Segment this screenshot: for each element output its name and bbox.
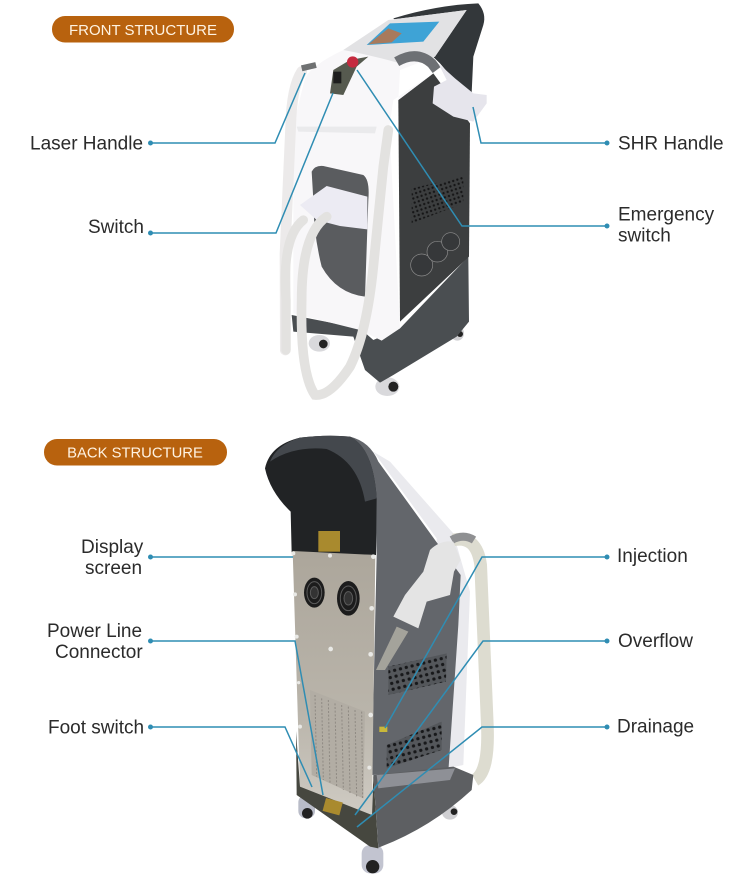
callout: Drainage: Drainage	[617, 716, 694, 738]
handle holder	[300, 186, 367, 229]
top hood	[265, 436, 377, 555]
callout: SHR Handle	[473, 107, 724, 154]
callout: Emergency switch	[357, 70, 715, 246]
callout: Injection: Injection	[617, 546, 688, 567]
callout: Foot switch: Foot switch	[48, 718, 144, 738]
heading: back structure: BACK STRUCTURE	[67, 446, 203, 462]
side base	[373, 767, 473, 848]
callout: Display screen	[81, 537, 293, 579]
front base	[292, 257, 469, 383]
top head dark	[393, 3, 484, 100]
callout: Power Line Connector: Power Line	[47, 621, 142, 642]
side vents and fans	[411, 177, 463, 276]
grey window	[312, 166, 369, 297]
warning label	[318, 531, 340, 552]
rear vent	[310, 690, 365, 798]
callout: Overflow	[355, 631, 693, 815]
display switch and emergency button	[330, 57, 368, 95]
white top slope	[373, 452, 470, 768]
callout: Laser Handle	[30, 73, 305, 154]
side connectors	[379, 727, 387, 732]
callout: Power Line Connector	[47, 621, 323, 795]
laser handle cable	[285, 72, 302, 350]
callout: Emergency switch: switch	[618, 226, 671, 246]
rear base	[296, 731, 378, 848]
callout: Switch	[88, 93, 333, 238]
callout: Emergency switch: Emergency	[618, 204, 715, 226]
heading: back structure	[44, 439, 227, 466]
front machine illustration	[285, 3, 487, 396]
back casters	[298, 795, 458, 873]
callout: Switch: Switch	[88, 217, 144, 238]
SHR handle	[433, 63, 487, 122]
callout: Overflow: Overflow	[618, 631, 693, 652]
shaded top face	[343, 10, 467, 63]
heading: front structure: FRONT STRUCTURE	[69, 22, 217, 39]
cable hose left	[285, 220, 303, 350]
callout: Drainage	[357, 716, 694, 827]
back machine illustration	[265, 436, 488, 873]
callout: Foot switch	[48, 718, 312, 787]
grey side panel	[350, 437, 461, 775]
main white body	[293, 10, 467, 341]
front panel recess	[297, 127, 377, 133]
cable hose front	[301, 130, 388, 395]
callout: SHR Handle: SHR Handle	[618, 134, 724, 154]
bolts	[291, 551, 376, 770]
callout: Injection	[385, 546, 688, 728]
front rear casters	[309, 326, 464, 396]
CE label	[323, 798, 343, 815]
dark side panel	[398, 73, 470, 322]
handgun handle	[393, 541, 461, 628]
heading: front structure	[52, 16, 234, 42]
callout: Display screen: screen	[85, 558, 142, 579]
side vents	[387, 653, 447, 768]
callout: Display screen: Display	[81, 537, 144, 558]
back plate	[293, 551, 375, 815]
screen	[367, 22, 439, 45]
handle connector	[376, 627, 408, 670]
hose	[453, 539, 488, 780]
fans	[304, 578, 360, 616]
SHR hose	[397, 56, 437, 70]
callout: Power Line Connector: Connector	[55, 642, 143, 663]
callout: Laser Handle: Laser Handle	[30, 134, 143, 154]
